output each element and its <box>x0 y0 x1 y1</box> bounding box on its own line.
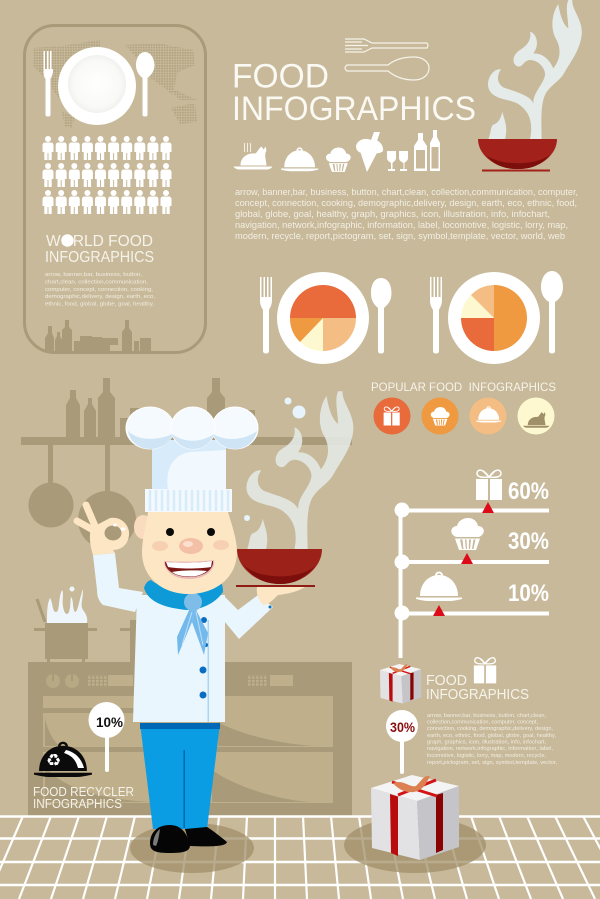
bottles silhouette <box>45 320 151 352</box>
pot with steam <box>34 586 140 663</box>
value: 60%: 60% <box>508 478 549 505</box>
pin: 30%: 30% <box>390 719 415 735</box>
text block: world food keywords: chart,clean, collection,communication, <box>45 280 149 286</box>
dotted world map <box>33 40 197 128</box>
title: INFOGRAPHICS <box>232 90 476 128</box>
text block: gift keywords: arrow, banner,bar, business, button, chart,clean, <box>427 713 546 719</box>
jacket <box>133 595 225 722</box>
icon: cloche <box>281 147 318 171</box>
axis lines <box>400 510 549 658</box>
floor shadow <box>130 823 254 873</box>
pin: 30% <box>386 710 418 774</box>
panel outline <box>24 26 206 352</box>
icon: ice cream <box>356 132 383 172</box>
OK hand <box>77 505 129 555</box>
icon row: food pictograms <box>234 130 440 172</box>
large gift box <box>344 775 486 873</box>
text block: world food keywords: arrow, banner,bar, business, button, <box>45 272 143 278</box>
people pictogram <box>42 136 172 214</box>
text block: world food keywords <box>45 272 156 308</box>
value: 10%: 10% <box>508 580 549 607</box>
heading: world food: INFOGRAPHICS <box>45 249 154 266</box>
heading: food infographics: FOOD <box>426 672 467 689</box>
icon: gift outline <box>474 658 496 683</box>
icon: chicken steam <box>244 143 251 152</box>
text block: keywords <box>235 187 578 241</box>
ear <box>134 515 152 539</box>
title <box>232 58 476 128</box>
text block: gift keywords: collection,communication, computer, concept, <box>427 720 538 726</box>
text block: world food keywords: demographic,delivery, design, earth, eco, <box>45 294 156 300</box>
pie plate 2 <box>430 271 563 364</box>
small gift box <box>380 664 421 704</box>
panel: world food <box>24 26 206 352</box>
text block: gift keywords: navigation, network,infographic, information, label, <box>427 746 553 752</box>
text block: keywords: arrow, banner,bar, business, button, chart,clean, collection,communication, computer, <box>235 187 578 197</box>
markers <box>433 502 494 616</box>
icon: plate <box>58 47 136 125</box>
text block: world food keywords: ethnic, food, global, globe, goal, healthy, <box>45 302 155 308</box>
steam <box>488 0 582 139</box>
icon: recycling cloche: ♻ <box>46 751 61 771</box>
icon: roast chicken <box>234 146 272 170</box>
icon: cloche <box>416 572 462 601</box>
plate <box>448 272 540 364</box>
hanging pans <box>28 445 136 549</box>
text block: gift keywords: report,pictogram, set, sign, symbol,template, vector, <box>427 760 557 766</box>
value: 30%: 30% <box>508 528 549 555</box>
icon: gift <box>476 470 502 500</box>
pie chart <box>290 285 356 351</box>
title: FOOD <box>232 58 329 96</box>
trousers <box>140 723 220 829</box>
text block: gift keywords: locomotive, logistic, lorry, map, modern, recycle, <box>427 753 546 759</box>
icon: spoon <box>136 52 154 116</box>
icon: fork <box>430 277 442 354</box>
shelf with bottles <box>21 378 352 445</box>
floor tiles <box>0 816 600 899</box>
pie chart <box>461 285 527 351</box>
mouth <box>164 560 214 579</box>
pie plate 1 <box>260 272 392 364</box>
neck scarf <box>144 580 223 655</box>
icon: fork <box>44 51 53 116</box>
text block: keywords: global, globe, goal, healthy, graph, graphics, icon, illustration, info, infochart, <box>235 209 550 219</box>
icon: spoon <box>371 278 392 354</box>
stove <box>28 662 352 816</box>
heading: food recycler: FOOD RECYCLER <box>33 784 134 799</box>
icon: cupcake <box>451 518 484 550</box>
popular icons <box>374 398 554 434</box>
shoes <box>150 825 227 853</box>
heading: popular food: POPULAR FOOD INFOGRAPHICS <box>371 380 556 394</box>
icon: spoon <box>541 271 563 354</box>
bowl <box>236 549 322 587</box>
serving hand <box>257 587 305 605</box>
icon: outlined spoon <box>345 57 429 80</box>
text block: world food keywords: computer, concept, connection, cooking, <box>45 287 154 293</box>
icon: cupcake badge <box>422 398 458 434</box>
bowl <box>478 139 557 169</box>
text block: gift keywords <box>427 713 557 766</box>
pin: 10%: 10% <box>96 714 124 730</box>
bowl with steam <box>478 0 582 172</box>
icon: gift badge <box>374 398 410 434</box>
icon: recycling cloche <box>34 742 92 777</box>
plate <box>277 272 369 364</box>
heading: world food: WORLD FOOD <box>46 233 153 250</box>
face <box>142 512 237 594</box>
kitchen backdrop <box>21 378 352 816</box>
hat <box>126 407 258 512</box>
text block: gift keywords: earth, eco, ethnic, food, global, globe, goal, healthy, <box>427 733 556 739</box>
pin: 10% <box>88 702 124 772</box>
text block: keywords: concept, connection, cooking, demographic,delivery, design, earth, eco, ethnic, food, <box>235 198 577 208</box>
text block: keywords: navigation, network,infographic, information, label, locomotive, logistic, lorry, map, <box>235 220 568 230</box>
text block: gift keywords: connection, cooking, demographic,delivery, design, <box>427 726 553 732</box>
heading: food recycler <box>33 784 134 811</box>
timeline chart <box>394 470 549 658</box>
raised arm <box>93 553 143 612</box>
icon: cupcake <box>326 148 351 172</box>
icon: outlined fork <box>345 39 428 52</box>
heading: food infographics: INFOGRAPHICS <box>426 686 529 703</box>
heading: food recycler: INFOGRAPHICS <box>33 796 122 811</box>
text block: keywords: modern, recycle, report,pictogram, set, sign, symbol,template, vector, world, web <box>235 231 565 241</box>
icon: fork <box>260 277 272 354</box>
heading: world food <box>45 233 154 266</box>
chef character <box>77 391 353 873</box>
text block: gift keywords: graph, graphics, icon, illustration, info, infochart, <box>427 740 546 746</box>
steam <box>244 391 353 550</box>
serving arm <box>225 595 273 639</box>
icon: cloche badge <box>470 398 506 434</box>
icon: chicken badge <box>518 398 554 434</box>
icon: wine glasses <box>387 151 408 171</box>
heading: food infographics <box>426 672 529 703</box>
icon: bottles <box>414 130 440 171</box>
